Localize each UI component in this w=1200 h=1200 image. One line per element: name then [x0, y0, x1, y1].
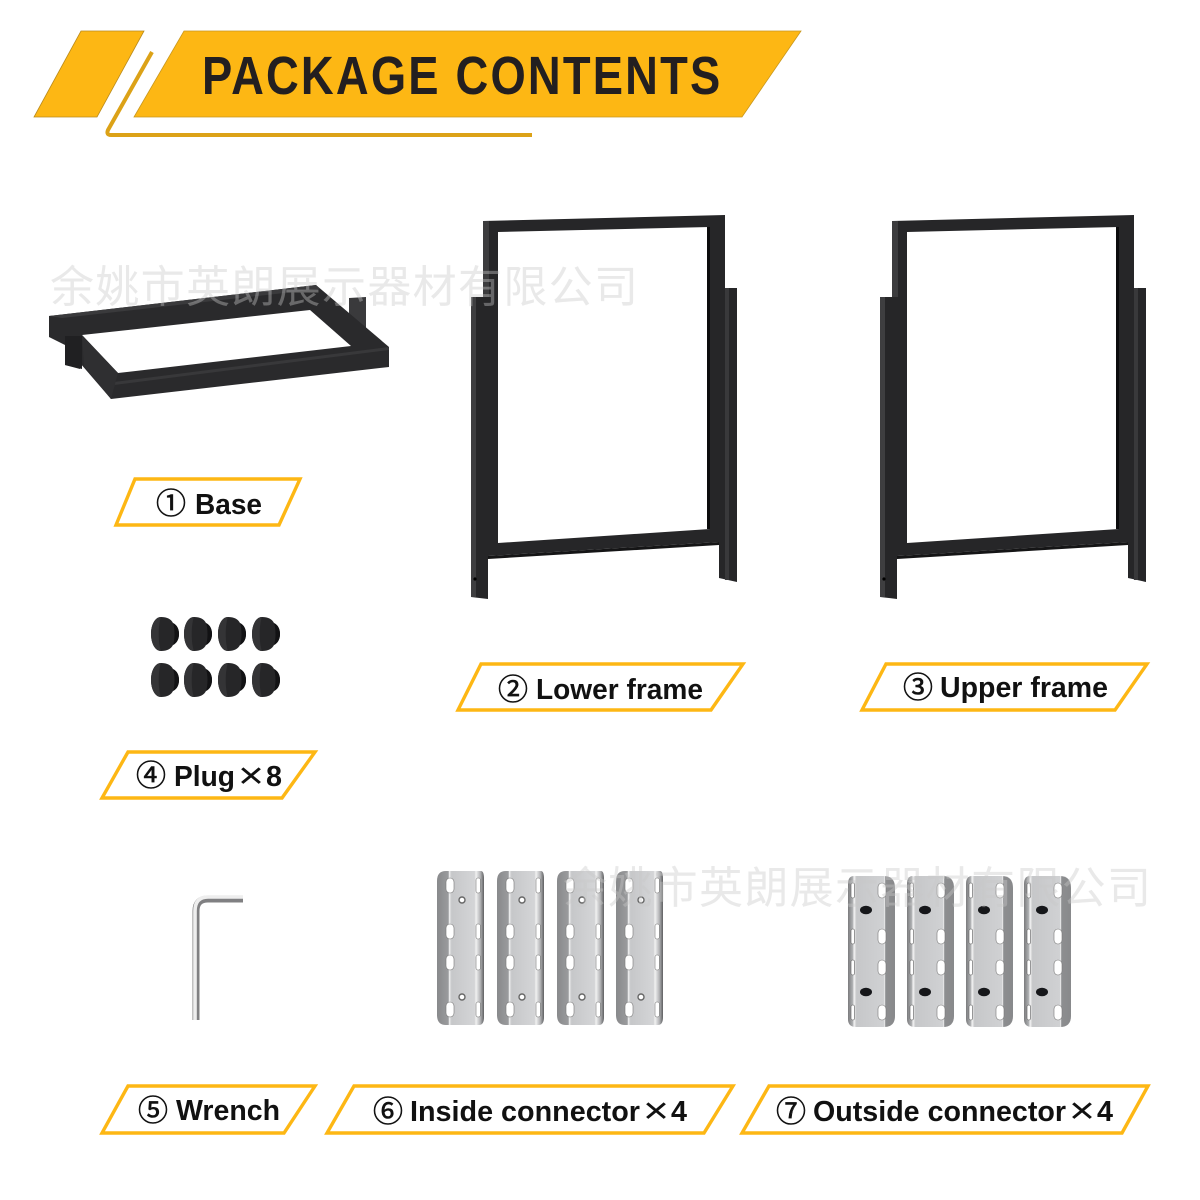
label: base: ① [156, 479, 186, 523]
item 1: base frame [49, 285, 389, 399]
banner underline stroke [107, 52, 532, 135]
label: plug: 8 [266, 761, 282, 793]
item 5: wrench [195, 897, 243, 1020]
banner main shape [134, 31, 801, 117]
label: upper frame: ③ [903, 663, 933, 707]
label: outside connector [742, 1086, 1148, 1133]
label: outside connector: 4 [1097, 1096, 1113, 1128]
label: inside connector: × [643, 1090, 669, 1131]
label: plug [102, 751, 315, 798]
label: plug: Plug [174, 761, 235, 793]
label: plug: ④ [136, 751, 166, 795]
header banner [34, 31, 801, 135]
label: wrench [102, 1086, 315, 1133]
label: lower frame: Lower frame [536, 674, 703, 706]
item 2: lower frame [471, 215, 737, 599]
label: wrench: Wrench [176, 1095, 280, 1127]
label: outside connector: Outside connector [813, 1096, 1066, 1128]
label: plug: × [238, 755, 264, 796]
label: lower frame: ② [498, 665, 528, 709]
item 7: outside connectors [848, 876, 1071, 1027]
label: lower frame [458, 664, 743, 710]
label: inside connector: Inside connector [410, 1096, 640, 1128]
label: outside connector: × [1069, 1090, 1095, 1131]
label: outside connector: ⑦ [776, 1087, 806, 1131]
label: inside connector: 4 [671, 1096, 687, 1128]
banner left accent [34, 31, 144, 117]
label: upper frame [862, 663, 1147, 710]
title: PACKAGE CONTENTS [202, 45, 720, 106]
watermark bottom: 余姚市英朗展示器材有限公司 [563, 852, 1151, 916]
item 4: plugs [151, 617, 280, 697]
label: wrench: ⑤ [138, 1086, 168, 1130]
label: base: Base [195, 489, 262, 521]
label: inside connector [327, 1086, 733, 1133]
item 3: upper frame [880, 215, 1146, 599]
label: inside connector: ⑥ [373, 1087, 403, 1131]
item 6: inside connectors [437, 871, 663, 1025]
watermark top: 余姚市英朗展示器材有限公司 [50, 251, 638, 315]
label: upper frame: Upper frame [940, 672, 1108, 704]
label: base [116, 479, 300, 525]
